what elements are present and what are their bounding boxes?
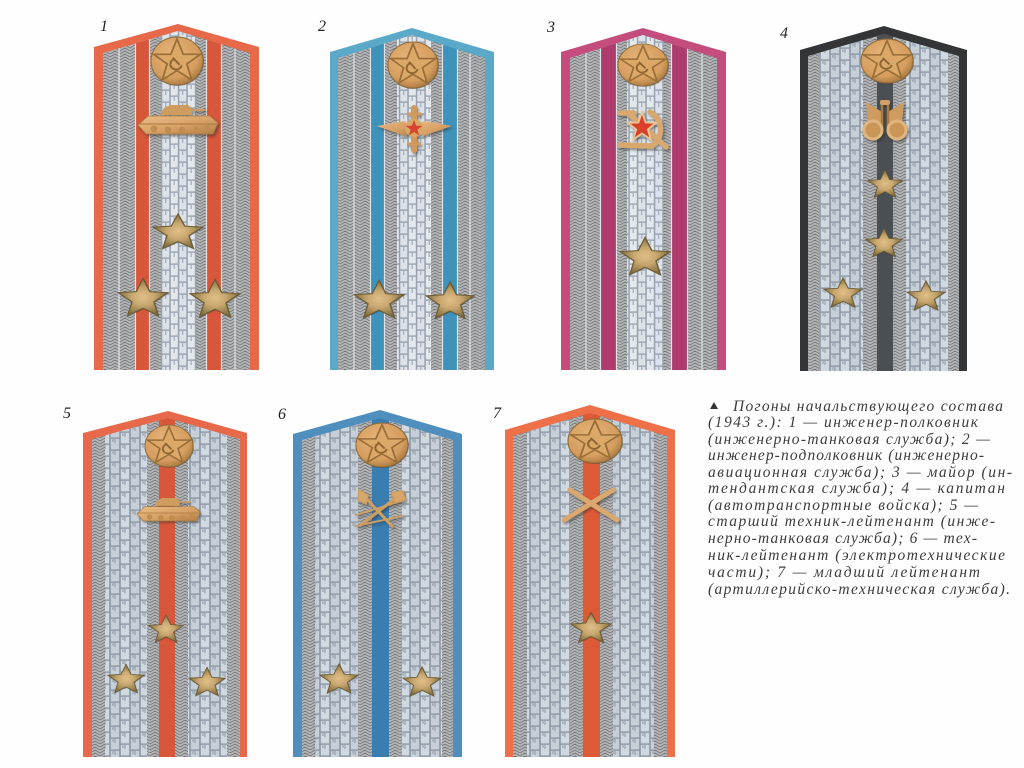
board 3: major bbox=[561, 28, 726, 370]
button 1 bbox=[151, 37, 203, 85]
star 5a bbox=[149, 615, 183, 642]
caption triangle marker bbox=[710, 402, 718, 409]
caption text block: (1943 г.): 1 — инженер-полковник bbox=[708, 414, 979, 431]
star 1c bbox=[190, 280, 240, 317]
board number 1: 1 bbox=[100, 18, 108, 35]
caption text block: авиационная служба); 3 — майор (ин- bbox=[708, 464, 1012, 481]
star 4a bbox=[868, 170, 902, 197]
tank emblem 1 bbox=[138, 105, 218, 134]
caption text block: (артиллерийско-техническая служба). bbox=[708, 581, 1010, 598]
star 1a bbox=[153, 214, 203, 248]
star 3a bbox=[620, 238, 670, 275]
board 6: technician lieutenant bbox=[293, 410, 462, 757]
board number 5: 5 bbox=[63, 405, 71, 422]
caption text block: Погоны начальствующего состава bbox=[732, 398, 1003, 415]
board number 2: 2 bbox=[318, 18, 326, 35]
board 4: captain bbox=[800, 26, 967, 371]
motor transport emblem bbox=[864, 100, 906, 139]
tank emblem 5 bbox=[137, 498, 200, 521]
board 2: engineer lieutenant colonel bbox=[330, 28, 494, 370]
caption text block bbox=[708, 398, 1012, 598]
star 4b bbox=[866, 228, 902, 257]
star 6b bbox=[403, 667, 441, 696]
caption text block: (автотранспортные войска); 5 — bbox=[708, 497, 978, 514]
star 6a bbox=[320, 664, 358, 693]
hammer and sickle emblem bbox=[620, 112, 666, 147]
button 3 bbox=[618, 44, 668, 86]
caption text block: тендантская служба); 4 — капитан bbox=[708, 480, 1005, 497]
button 2 bbox=[388, 42, 438, 88]
caption text block: части); 7 — младший лейтенант bbox=[708, 564, 980, 581]
button 6 bbox=[356, 423, 408, 467]
star 4c bbox=[824, 278, 862, 307]
board number 7: 7 bbox=[493, 405, 502, 422]
star 2a bbox=[354, 280, 404, 318]
board number 3: 3 bbox=[546, 19, 555, 36]
board 5: senior technician lieutenant bbox=[83, 411, 247, 757]
button 7 bbox=[568, 419, 622, 463]
crossed cannons emblem bbox=[564, 490, 617, 520]
caption text block: инженер-подполковник (инженерно- bbox=[708, 447, 984, 464]
caption text block: ник-лейтенант (электротехнические bbox=[708, 547, 1005, 564]
star 5b bbox=[108, 664, 144, 693]
caption text block: нерно-танковая служба); 6 — тех- bbox=[708, 530, 977, 547]
button 5 bbox=[145, 425, 193, 467]
electrotechnical emblem bbox=[356, 490, 405, 526]
board number 4: 4 bbox=[780, 25, 788, 42]
board 1: engineer colonel bbox=[94, 24, 259, 370]
caption text block: (инженерно-танковая служба); 2 — bbox=[708, 431, 990, 448]
star 5c bbox=[189, 668, 225, 696]
button 4 bbox=[861, 39, 913, 83]
star 4d bbox=[907, 281, 945, 310]
caption text block: старший техник-лейтенант (инже- bbox=[708, 513, 995, 530]
star 2b bbox=[426, 282, 474, 318]
board 7: junior lieutenant bbox=[505, 405, 675, 757]
aviation emblem bbox=[377, 108, 452, 150]
star 1b bbox=[118, 278, 168, 316]
board number 6: 6 bbox=[278, 406, 286, 423]
star 7a bbox=[571, 612, 611, 642]
